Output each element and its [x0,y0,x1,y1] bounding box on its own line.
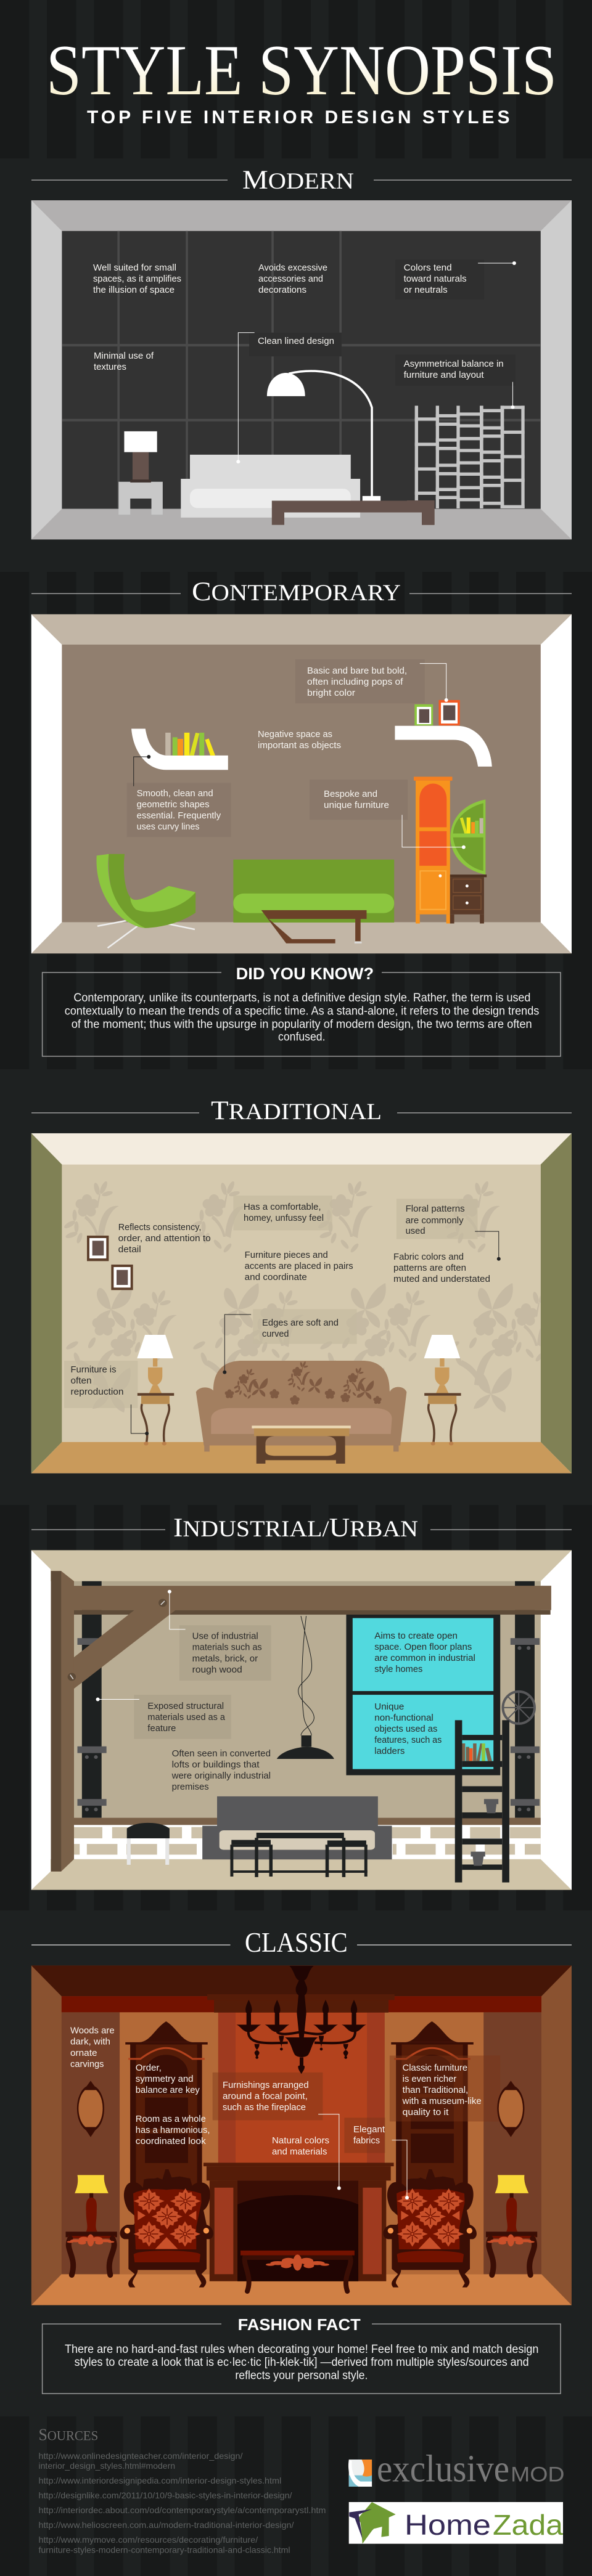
panel: modern [31,166,572,539]
logo icon: chair [348,2460,372,2487]
source links: http://www.helioscreen.com.au/modern-traditional-interior-design/ [38,2520,294,2530]
text: classic notes: Room as a whole [136,2114,206,2124]
text: traditional notes: and coordinate [245,1273,307,1282]
text: industrial notes [147,1631,475,1792]
callout heading: FASHION FACT [238,2315,361,2334]
text: classic notes: symmetry and [136,2074,194,2084]
text: industrial notes: metals, brick, or [192,1654,258,1664]
text: contemporary notes: bright color [307,688,355,698]
callout body: styles to create a look that is ec·lec·tic [ih-klek-tik] —derived from multiple styles/sources and [75,2356,529,2369]
text: traditional notes: used [406,1226,426,1236]
shaded note backgrounds [64,1196,477,1408]
fireplace [204,2162,394,2281]
text: traditional notes: order, and attention to [118,1234,211,1244]
text: contemporary notes: geometric shapes [137,800,210,810]
leader lines: contemporary [134,664,466,849]
text: classic notes: Furnishings arranged [223,2081,309,2090]
text: industrial notes: ladders [374,1747,405,1756]
room illustration: classic [31,1965,572,2305]
panel: traditional [0,1096,572,1473]
coffee table [261,910,366,944]
text: traditional notes: Reflects consistency, [118,1223,201,1233]
text: classic notes: has a harmonious, [136,2126,210,2135]
text: industrial notes: premises [172,1782,209,1792]
heading: modern: MODERN [242,166,354,195]
callout: did you know [43,964,561,1056]
callout heading: DID YOU KNOW? [236,964,374,983]
room illustration: contemporary [31,614,572,953]
text: industrial notes: materials used as a [147,1713,226,1722]
source links: interior_design_styles.html#modern [38,2461,175,2471]
text: modern notes [93,263,504,380]
brick wainscot [74,1818,541,1859]
text: contemporary notes: uses curvy lines [137,822,200,832]
source links [38,2451,326,2555]
cabinet [414,776,452,924]
heading: industrial: INDUSTRIAL/ URBAN [173,1514,418,1543]
armchair right [384,2169,477,2288]
heading: classic: CLASSIC [245,1927,348,1958]
valve wheel [503,1692,535,1724]
note shading [213,2056,500,2153]
text: industrial notes: Aims to create open [374,1631,458,1641]
callout body: reflects your personal style. [235,2370,368,2382]
panel: contemporary [31,577,572,953]
half-round shelf [450,799,485,874]
callout body: confused. [278,1031,326,1044]
left lamp and table [137,1335,174,1445]
text: classic notes: such as the fireplace [223,2103,306,2113]
text: industrial notes: Use of industrial [192,1631,258,1641]
logo: HomeZada [349,2502,563,2544]
text: contemporary notes [137,666,407,832]
source links: http://designlike.com/2011/10/10/9-basic-styles-in-interior-design/ [38,2490,292,2500]
text: classic notes: ornate [70,2048,97,2058]
room illustration: industrial [31,1550,572,1890]
wall mirror, lamp and table, left [66,2081,117,2275]
text: modern notes: textures [94,362,126,372]
callout body: contextually to mean the trends of a specific time. As a stand-alone, it refers to the design trends [65,1005,539,1017]
text: industrial notes: space. Open floor plans [374,1642,472,1652]
text: traditional notes: patterns are often [393,1263,466,1273]
text: classic notes: Elegant [353,2125,385,2135]
text: industrial notes: materials such as [192,1643,262,1653]
text: contemporary notes: unique furniture [324,801,389,810]
callout body: Contemporary, unlike its counterparts, is not a definitive design style. Rather, the term is used [73,992,530,1005]
text: classic notes: than Traditional, [403,2085,468,2095]
heading: traditional: TRADITIONAL [211,1096,382,1125]
text: classic notes: coordinated look [136,2137,207,2146]
text: industrial notes: features, such as [374,1735,442,1745]
heading: contemporary: CONTEMPORARY [192,577,401,606]
callout body: There are no hard-and-fast rules when decorating your home! Feel free to mix and match design [65,2343,538,2356]
text: traditional notes: Has a comfortable, [244,1202,321,1212]
text: traditional notes: are commonly [406,1216,464,1226]
room illustration: modern [31,200,572,539]
side table and lamp [118,431,163,515]
text: industrial notes: were originally industrial [171,1771,271,1781]
ladder with books and pots [455,1720,509,1883]
text: traditional notes: detail [118,1245,141,1255]
leader lines: traditional [131,1231,501,1435]
text: industrial notes: are common in industrial [374,1653,475,1663]
pendant lamp [277,1616,334,1759]
text: classic notes: Woods are [70,2026,115,2036]
wardrobes [125,2021,474,2190]
text: industrial notes: objects used as [374,1724,437,1734]
text: traditional notes: Edges are soft and [262,1318,339,1328]
callout: fashion fact [43,2315,561,2394]
shelving [415,406,525,508]
panel: industrial [31,1514,572,1890]
text: contemporary notes: essential. Frequently [137,811,221,821]
sofa floral upholstery [225,1361,382,1404]
text: traditional notes: homey, unfussy feel [244,1213,324,1223]
armchair left [120,2169,213,2288]
text: modern notes: decorations [258,285,306,295]
text: modern notes: spaces, as it amplifies [93,274,181,284]
text: industrial notes: Exposed structural [147,1702,224,1711]
text: classic notes: with a museum-like [402,2097,482,2106]
text: modern notes: Colors tend [404,263,452,273]
text: industrial notes: lofts or buildings that [172,1760,260,1770]
window [346,1615,500,1775]
room shell: traditional [31,1133,572,1473]
text: modern notes: Minimal use of [94,351,154,361]
text: classic notes: Order, [136,2063,162,2073]
picture frames [87,1236,133,1290]
source links: furniture-styles-modern-contemporary-traditional-and-classic.html [38,2545,290,2555]
logo: HomeZada: Home [405,2509,491,2541]
text: modern notes: the illusion of space [93,285,175,295]
text: modern notes: Clean lined design [258,336,334,346]
right shelf with frames [395,700,492,767]
timber beams [51,1571,551,1872]
nightstand [450,874,487,924]
wallpaper floral pattern [64,1181,540,1412]
source links: http://www.onlinedesignteacher.com/interior_design/ [38,2451,243,2461]
text: modern notes: Well suited for small [93,263,176,273]
source links: http://interiordec.about.com/od/contemporarystyle/a/contemporarystl.htm [38,2505,326,2515]
text: modern notes: Avoids excessive [258,263,327,273]
sources [38,2425,326,2555]
text: classic notes: Classic furniture [403,2063,467,2073]
leader lines: classic [318,2114,409,2199]
text: industrial notes: Unique [374,1702,404,1712]
right lamp and table [424,1335,461,1445]
text: modern notes: accessories and [258,274,323,284]
sofa [233,860,394,923]
text: industrial notes: feature [147,1724,176,1734]
text: classic notes: balance are key [136,2085,200,2095]
text: classic notes [70,2026,482,2157]
text: modern notes: or neutrals [404,285,448,295]
floor lamp [267,371,380,501]
text: industrial notes: Often seen in converted [172,1749,271,1759]
text: classic notes: quality to it [403,2108,448,2117]
text: contemporary notes: Bespoke and [324,789,377,799]
sources heading: SOURCES [38,2425,98,2444]
logo icon: house [349,2502,396,2544]
text: classic notes: around a focal point, [223,2092,308,2101]
table and benches [230,1833,368,1877]
text: traditional notes: curved [262,1329,289,1339]
text: contemporary notes: often including pops of [307,677,404,687]
text: traditional notes: often [70,1376,91,1386]
subtitle: TOP FIVE INTERIOR DESIGN STYLES [87,107,509,128]
text: traditional notes: Fabric colors and [393,1252,464,1262]
text: traditional notes: Furniture is [70,1365,116,1375]
text: modern notes: Asymmetrical balance in [404,359,504,369]
text: traditional notes: muted and understated [393,1274,490,1284]
stool [127,1823,170,1865]
panel: classic [31,1927,572,2305]
leader lines: modern [236,261,516,463]
pipes and brackets [78,1581,540,1818]
sofa [181,455,360,518]
text: industrial notes: style homes [374,1665,422,1674]
logo: exclusiveMOD: exclusive [377,2448,509,2490]
leader lines: industrial [96,1590,186,1701]
text: traditional notes [70,1202,490,1397]
chimney hood [207,1994,395,2013]
text: classic notes: dark, with [70,2037,110,2047]
wall mirror, lamp and table, right [486,2081,537,2275]
logo: HomeZada: Zada [493,2509,563,2541]
source links: http://www.mymove.com/resources/decorating/furniture/ [38,2535,258,2545]
text: contemporary notes: important as objects [258,741,341,751]
text: traditional notes: reproduction [70,1387,123,1397]
source links: http://www.interiordesignipedia.com/interior-design-styles.html [38,2476,281,2485]
text: industrial notes: non-functional [374,1713,434,1723]
hearth table [240,2251,355,2291]
text: traditional notes: Furniture pieces and [245,1250,328,1260]
text: classic notes: carvings [70,2060,104,2069]
callout body [65,2343,538,2382]
callout body: of the moment; thus with the upsurge in popularity of modern design, the two terms are often [72,1018,532,1031]
text: classic notes: is even richer [403,2074,456,2084]
coffee table: traditional [252,1425,351,1464]
text: classic notes: and materials [272,2147,327,2157]
furniture: traditional [137,1335,461,1451]
text: traditional notes: accents are placed in pairs [245,1262,353,1271]
sofa frame [196,1361,406,1451]
text: contemporary notes: Negative space as [258,730,332,740]
coffee table end overlapping shelving [407,500,435,525]
logo: exclusiveMOD [348,2448,565,2490]
logo: exclusiveMOD: MOD [511,2463,565,2487]
text: contemporary notes: Basic and bare but bold, [307,666,407,676]
coffee table [272,501,434,525]
text: classic notes: Natural colors [272,2136,329,2146]
text: industrial notes: rough wood [192,1665,242,1675]
left shelf with books [131,729,228,770]
sofa [202,1796,392,1859]
text: classic notes: fabrics [353,2136,380,2146]
lounge chair [96,854,195,948]
text: contemporary notes: Smooth, clean and [137,789,213,799]
text: modern notes: furniture and layout [404,370,484,380]
text: modern notes: toward naturals [404,274,467,284]
text: traditional notes: Floral patterns [406,1204,465,1214]
callout body [65,992,539,1044]
chandelier [236,1966,366,2074]
